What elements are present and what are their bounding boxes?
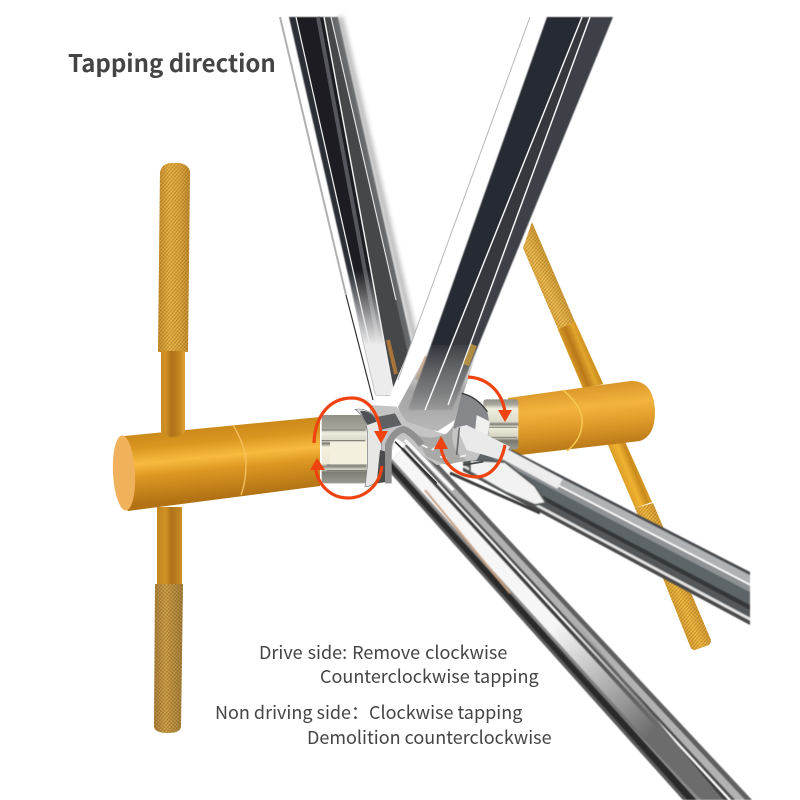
- long lower frame tube: [385, 437, 752, 800]
- left gold cylinder: [111, 417, 320, 511]
- back handle lower knurl: [635, 503, 711, 650]
- arrow: upper arc: [468, 377, 512, 422]
- text: non-driving side instructions: Demolition counterclockwise: [307, 724, 552, 750]
- left handle upper knurl: [158, 163, 190, 352]
- right cup collar: [453, 393, 490, 437]
- tube highlight near joint: [462, 431, 560, 484]
- text: drive side instructions: [259, 639, 539, 689]
- copper reflection: [425, 490, 510, 593]
- weld bead: [413, 427, 467, 465]
- right frame tube: [450, 425, 750, 625]
- right tube stub: [457, 425, 510, 460]
- bottom bracket junction: [322, 393, 518, 490]
- top-left frame tube: [280, 17, 423, 400]
- rotation arrows: non-drive side: [434, 377, 512, 477]
- shell dark band: [370, 413, 402, 430]
- title: Tapping direction: [68, 44, 276, 79]
- back handle lower shaft: [608, 437, 652, 508]
- right threaded cup: [483, 399, 518, 449]
- tube fade near joint: [347, 270, 394, 395]
- arrow: upper clockwise arc: [314, 398, 388, 444]
- swaged groove: [470, 460, 546, 505]
- left gold handle: [154, 163, 190, 733]
- back tool handle: [523, 222, 711, 650]
- text: non-driving side instructions: Non driving side：Clockwise tapping: [215, 699, 522, 725]
- back handle upper shaft: [558, 322, 603, 388]
- top-right frame tube: [390, 17, 613, 431]
- cylinder end cap: [111, 435, 137, 511]
- tube lower silver fade: [398, 345, 479, 431]
- text: drive side instructions: Drive side: Remove clockwise: [259, 639, 507, 665]
- cylinder seam: [563, 390, 582, 451]
- rotation arrows: drive side: [310, 398, 388, 498]
- gold reflection: [388, 340, 396, 374]
- lower tube collar: [388, 429, 422, 483]
- right gold cylinder: [508, 381, 655, 456]
- cylinder seam: [233, 425, 246, 495]
- left handle upper shaft: [161, 351, 185, 437]
- left handle lower shaft: [157, 507, 182, 586]
- arrow: lower arc: [310, 458, 382, 498]
- left handle lower knurl: [154, 584, 183, 733]
- left threaded cup: [322, 415, 368, 483]
- text: drive side instructions: Counterclockwise tapping: [320, 663, 539, 689]
- back handle upper knurl: [523, 222, 575, 329]
- text: non-driving side instructions: [215, 699, 552, 750]
- left cup collar: [355, 409, 392, 487]
- junction shell: [367, 395, 490, 483]
- lower tube grey fade: [517, 580, 723, 800]
- arrow: lower arc: [434, 436, 505, 477]
